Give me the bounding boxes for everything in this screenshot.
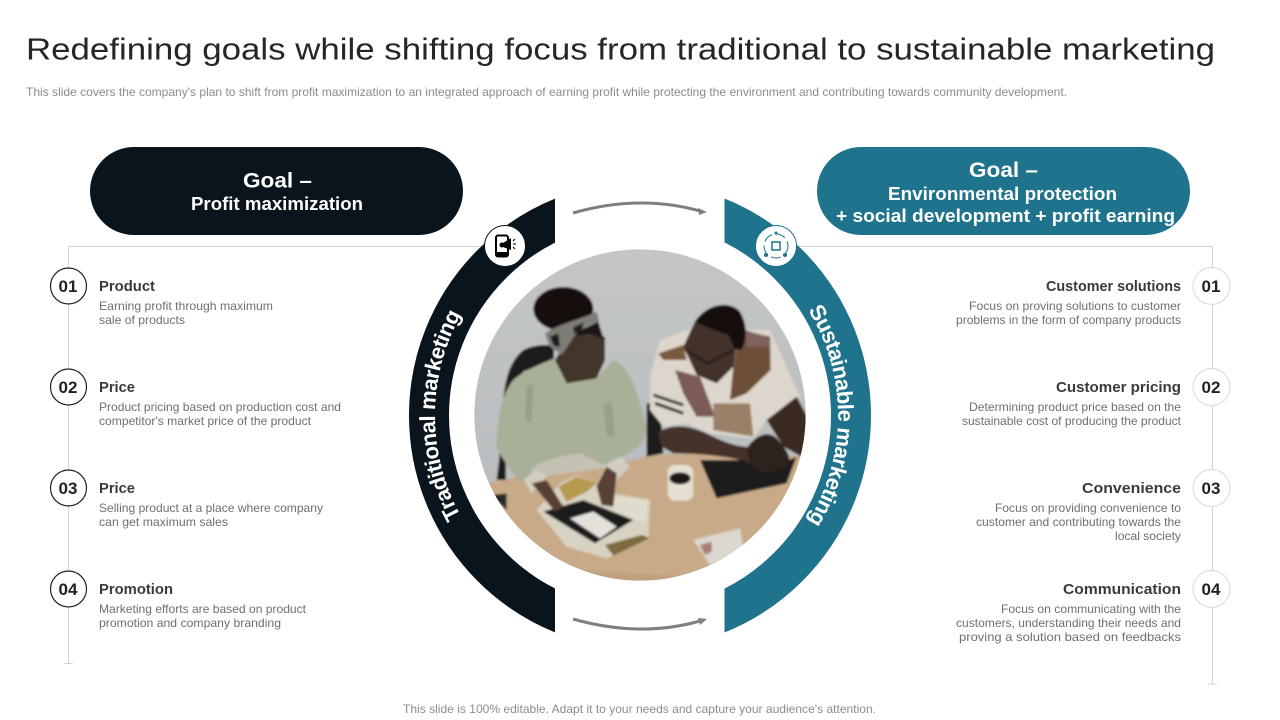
- item 04: communication: Communication: [1063, 581, 1181, 598]
- ring: traditional marketing: [409, 198, 555, 632]
- item 02: customer pricing: sustainable cost of producing the product: [962, 414, 1182, 428]
- item 04: communication: customers, understanding their needs and: [956, 616, 1181, 630]
- item 01: product: Earning profit through maximum: [99, 299, 273, 313]
- item 04: promotion: Promotion: [99, 581, 173, 598]
- item 01: customer solutions: Focus on proving solutions to customer: [969, 299, 1181, 313]
- footer note: This slide is 100% editable. Adapt it to your needs and capture your audience's attention.: [403, 702, 876, 716]
- title: Redefining goals while shifting focus from traditional to sustainable marketing: [26, 32, 1215, 66]
- ring: traditional marketing: Traditional marketing: [419, 310, 463, 523]
- item 02: customer pricing: Determining product price based on the: [969, 400, 1181, 414]
- item 03: convenience: customer and contributing towards the: [976, 515, 1181, 529]
- goal pill: profit maximization: Profit maximization: [191, 194, 363, 214]
- goal pill: environmental protection: Environmental protection: [888, 184, 1117, 204]
- item 04: promotion: 04: [59, 580, 78, 599]
- item 03: convenience: local society: [1115, 529, 1181, 543]
- item 03: price: 03: [59, 479, 77, 498]
- ring: sustainable marketing: Sustainable marketing: [806, 305, 854, 526]
- item 02: price: Price: [99, 379, 135, 396]
- goal pill: profit maximization: [90, 147, 463, 235]
- item 03: price: Selling product at a place where company: [99, 501, 323, 515]
- item 04: communication: 04: [1202, 580, 1221, 599]
- item 04: communication: Focus on communicating with the: [1001, 602, 1181, 616]
- goal pill: environmental protection: Goal –: [969, 159, 1038, 182]
- item 02: price: 02: [59, 378, 77, 397]
- item 01: product: sale of products: [99, 313, 185, 327]
- icon: sustainability cycle: [756, 226, 796, 266]
- item 03: price: can get maximum sales: [99, 515, 228, 529]
- ring: sustainable marketing: [724, 198, 871, 632]
- left timeline connector: [64, 246, 490, 664]
- item 03: convenience: Convenience: [1082, 480, 1181, 497]
- item 01: customer solutions: 01: [1202, 277, 1220, 296]
- right timeline connector: [790, 246, 1217, 684]
- item 02: customer pricing: 02: [1202, 378, 1220, 397]
- item 01: customer solutions: problems in the form of company products: [956, 313, 1181, 327]
- item 04: communication: proving a solution based on feedbacks: [959, 630, 1181, 644]
- item 01: customer solutions: Customer solutions: [1046, 278, 1181, 295]
- arrow: bottom: [573, 618, 707, 629]
- central photo: two colleagues at a table: [467, 247, 813, 590]
- item 03: convenience: [976, 470, 1230, 543]
- goal pill: environmental protection: [817, 147, 1190, 235]
- item 03: price: Price: [99, 480, 135, 497]
- item 02: price: [50, 369, 341, 428]
- item 02: customer pricing: Customer pricing: [1056, 379, 1181, 396]
- subtitle: This slide covers the company's plan to shift from profit maximization to an integrated approach of earning profit while protecting the environment and contributing towards community development.: [26, 85, 1067, 99]
- item 02: customer pricing: [962, 368, 1230, 428]
- item 03: convenience: 03: [1202, 479, 1220, 498]
- item 01: product: [50, 268, 273, 327]
- item 01: product: Product: [99, 278, 155, 295]
- goal pill: environmental protection: + social development + profit earning: [836, 206, 1175, 226]
- item 03: convenience: Focus on providing convenience to: [995, 501, 1181, 515]
- item 04: communication: [956, 570, 1230, 644]
- item 04: promotion: promotion and company branding: [99, 616, 281, 630]
- item 01: customer solutions: [956, 268, 1230, 327]
- table is the lowest layer of the photo scene: [488, 452, 800, 580]
- item 02: price: Product pricing based on production cost and: [99, 400, 341, 414]
- icon: phone with megaphone: [484, 226, 526, 266]
- item 04: promotion: [50, 571, 307, 630]
- item 04: promotion: Marketing efforts are based on product: [99, 602, 307, 616]
- goal pill: profit maximization: Goal –: [243, 170, 312, 192]
- item 02: price: competitor's market price of the product: [99, 414, 312, 428]
- item 03: price: [50, 470, 323, 529]
- item 01: product: 01: [59, 277, 77, 296]
- arrow: top: [573, 203, 707, 215]
